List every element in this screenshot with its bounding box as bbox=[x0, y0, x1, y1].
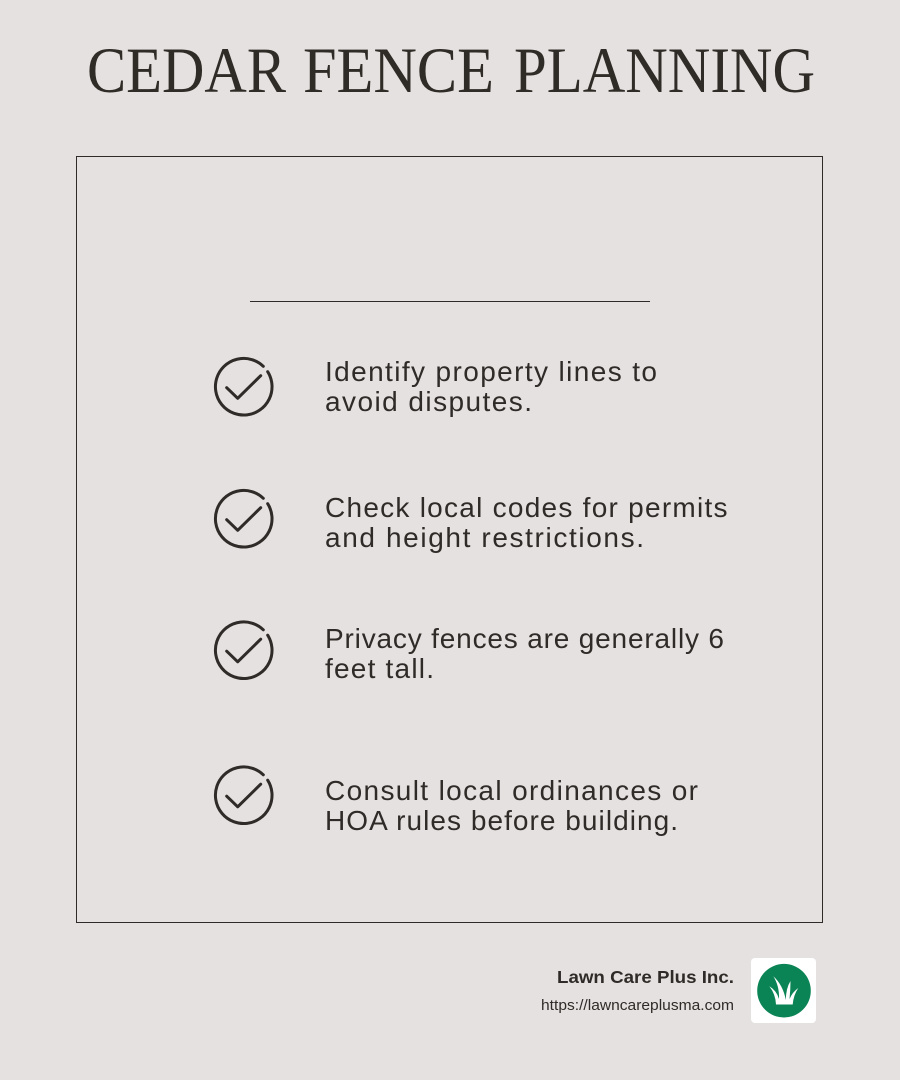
text: local codes: Check local codes for permits bbox=[325, 492, 728, 523]
text: local ordinances: Consult local ordinances or bbox=[325, 775, 698, 806]
icon: check circle 3 bbox=[215, 622, 272, 679]
panel: checklist frame bbox=[76, 156, 822, 922]
title: CEDAR bbox=[87, 35, 287, 107]
icon: check circle 1 bbox=[215, 358, 272, 415]
checklist item 2 bbox=[215, 490, 728, 553]
checklist item 3 bbox=[215, 622, 724, 684]
footer: website: https://lawncareplusma.com bbox=[541, 998, 734, 1014]
icon: company logo bbox=[751, 958, 816, 1023]
checklist item 1 bbox=[215, 356, 657, 417]
icon: check circle 2 bbox=[215, 490, 272, 547]
title: PLANNING bbox=[514, 35, 815, 107]
icon: check circle 4 bbox=[215, 767, 272, 824]
text: local codes: and height restrictions. bbox=[325, 522, 644, 553]
text: privacy fences: feet tall. bbox=[325, 653, 434, 684]
footer: company name: Lawn Care Plus Inc. bbox=[557, 967, 734, 987]
checklist item 4 bbox=[215, 767, 698, 836]
text: property lines: avoid disputes. bbox=[325, 386, 532, 417]
text: privacy fences: Privacy fences are generally 6 bbox=[325, 623, 724, 654]
text: local ordinances: HOA rules before building. bbox=[325, 805, 678, 836]
title: FENCE bbox=[303, 35, 494, 107]
text: property lines: Identify property lines to bbox=[325, 356, 657, 387]
